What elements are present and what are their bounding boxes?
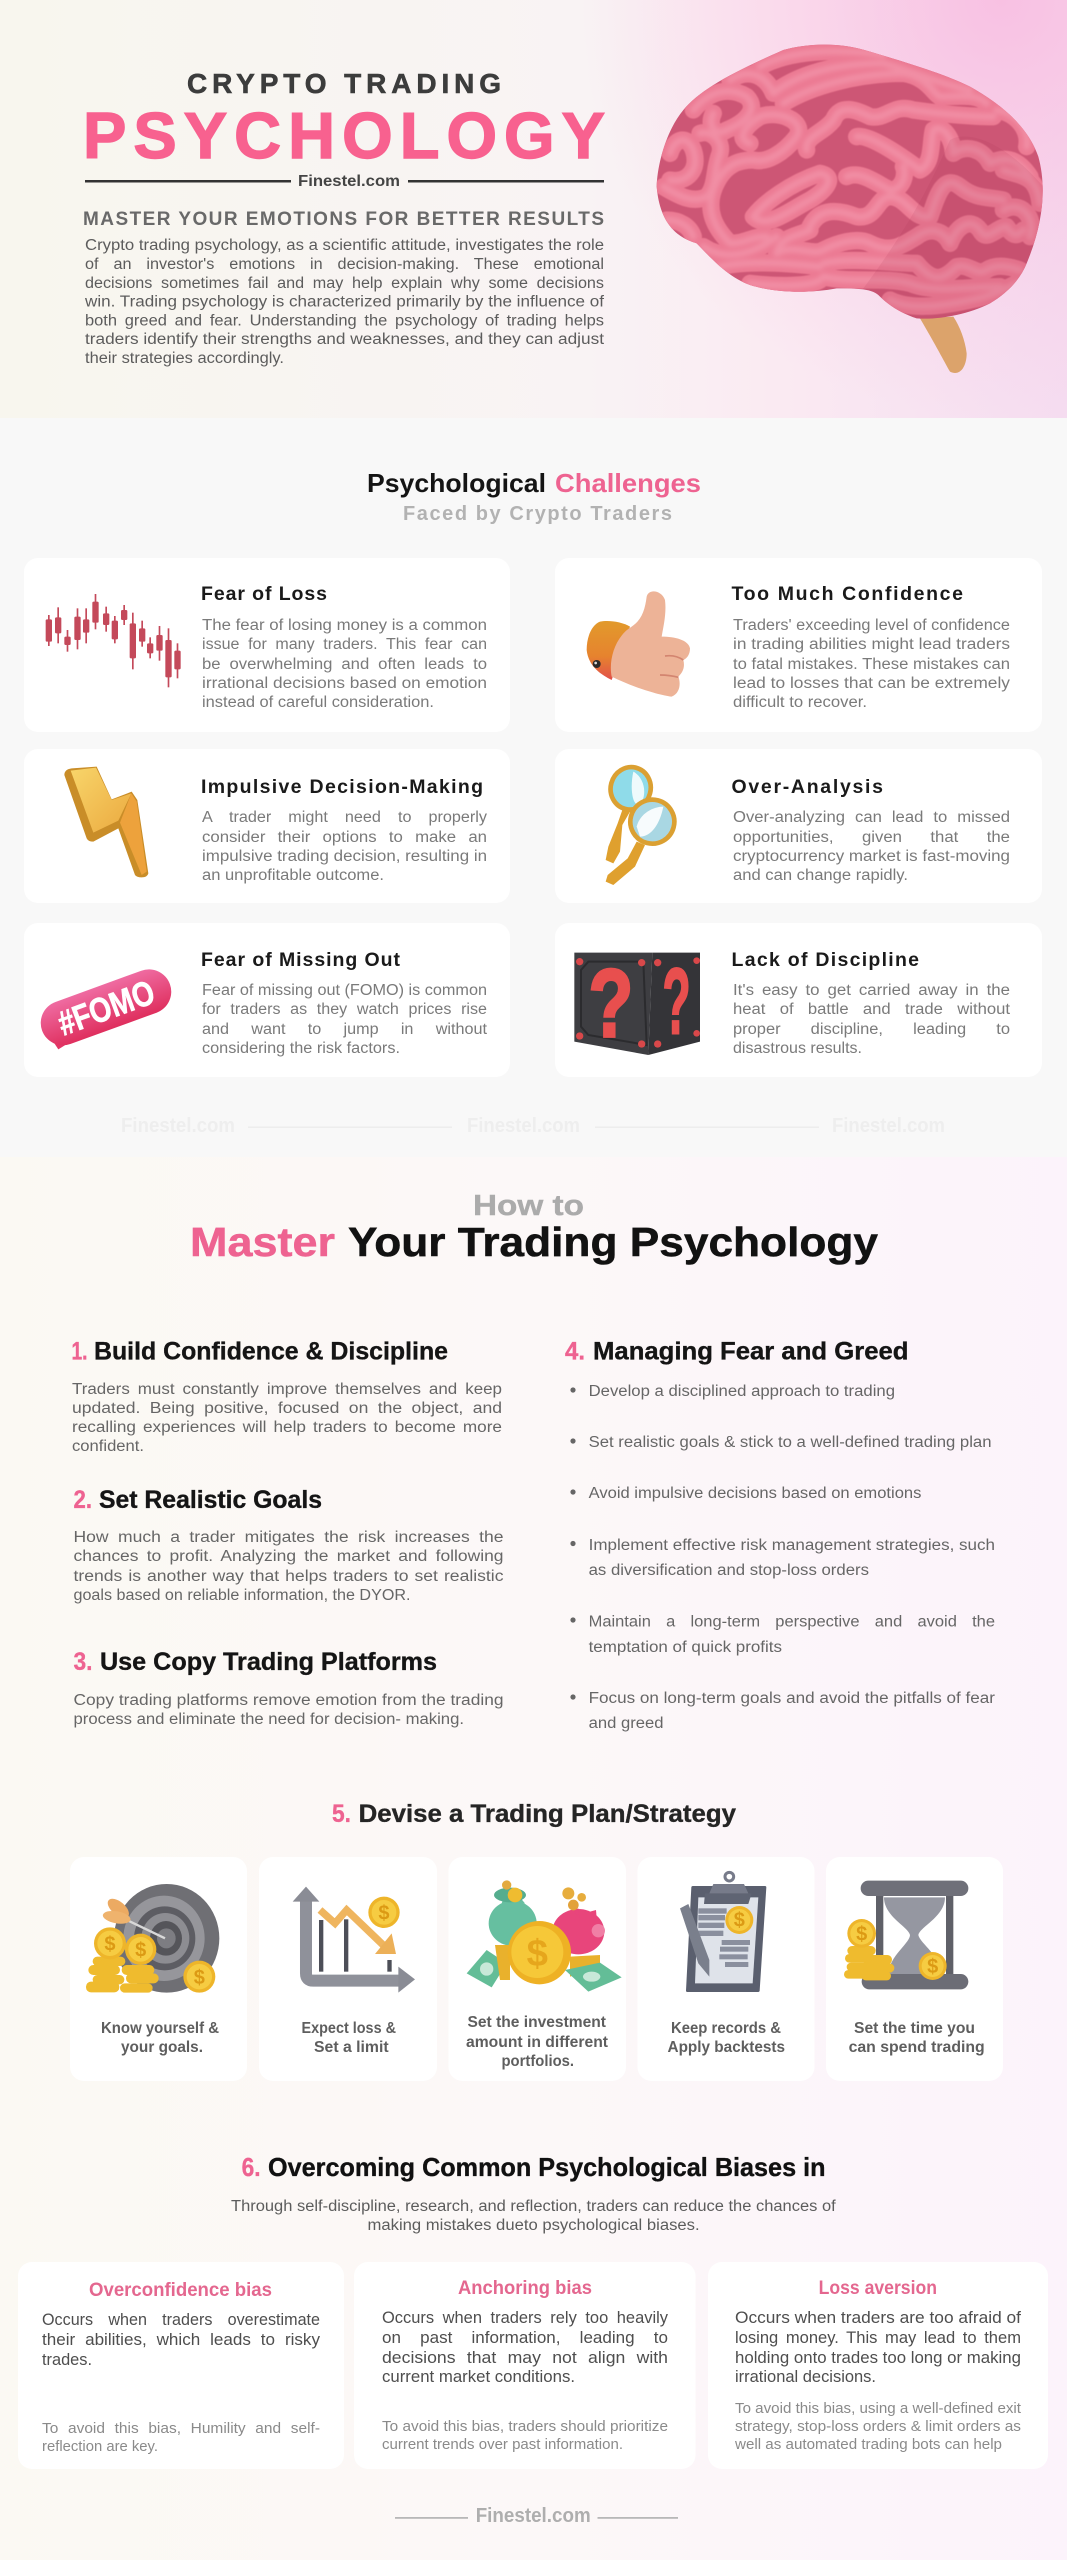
description (382, 2309, 669, 2386)
tip 1: recalling experiences will help traders to become more (72, 1419, 502, 1436)
avoidance tip: To avoid this bias, traders should prioritize (382, 2419, 668, 2435)
tip 3 (74, 1648, 503, 1728)
title: psychology: PSYCHOLOGY (83, 99, 605, 172)
card title: Lack of Discipline (732, 949, 919, 971)
tip 1: confident. (72, 1438, 144, 1455)
label: your goals. (121, 2039, 203, 2056)
watermark strip (121, 1115, 945, 1137)
description: holding onto trades too long or making (735, 2349, 1021, 2367)
tip 1: updated. Being positive, focused on the object, and (72, 1400, 502, 1417)
icon: hourglass with coins (844, 1881, 968, 1989)
label: Keep records & (671, 2020, 781, 2037)
icon: money bag, coin and piggy bank (467, 1880, 622, 1992)
card: anchoring bias (354, 2262, 696, 2469)
tip 3: process and eliminate the need for decision- making. (74, 1711, 464, 1728)
tip 3: 3. (74, 1648, 92, 1676)
label (668, 2020, 785, 2056)
avoidance tip (382, 2419, 668, 2453)
card: know yourself (70, 1857, 247, 2081)
icon: magnifying glasses (606, 763, 679, 885)
card title: Loss aversion (819, 2277, 937, 2299)
card text: It's easy to get carried away in the (733, 982, 1010, 999)
heading: master your trading psychology: Your Trading Psychology (348, 1219, 878, 1265)
description: Occurs when traders rely too heavily (382, 2309, 669, 2327)
card text (733, 982, 1011, 1057)
icon: question mark box: ? (662, 949, 691, 1053)
card title: Over-Analysis (732, 776, 883, 798)
card text (202, 809, 487, 884)
tip 4: managing fear and greed: Set realistic goals & stick to a well-defined trading plan (589, 1434, 992, 1451)
description: decisions that may not align with (382, 2349, 668, 2367)
tip 4: managing fear and greed: as diversification and stop-loss orders (589, 1562, 869, 1579)
label: Apply backtests (668, 2039, 785, 2056)
tip 1: Build Confidence & Discipline (94, 1338, 448, 1366)
card text: and want to jump in without (202, 1021, 488, 1038)
section heading 6: Overcoming Common Psychological Biases in (268, 2152, 826, 2182)
avoidance tip: reflection are key. (42, 2439, 158, 2455)
tip 2: goals based on reliable information, the DYOR. (74, 1587, 411, 1604)
description: losing money. This may lead to them (735, 2329, 1021, 2347)
icon: question mark box (574, 949, 700, 1058)
description: Occurs when traders are too afraid of (735, 2309, 1021, 2327)
label: Know yourself & (101, 2020, 219, 2037)
intro paragraph: traders identify their strengths and weaknesses, and they can adjust (85, 331, 605, 348)
footer site label: Finestel.com (476, 2505, 591, 2527)
label: can spend trading (849, 2039, 985, 2056)
card text (202, 982, 488, 1057)
tip 2: chances to profit. Analyzing the market and following (74, 1548, 504, 1565)
card: fear of missing out (24, 923, 510, 1077)
card text: in trading abilities might lead traders (733, 636, 1010, 653)
label (849, 2020, 985, 2056)
tip 2: How much a trader mitigates the risk increases the (74, 1529, 504, 1546)
label (466, 2014, 609, 2070)
tip 4: managing fear and greed (565, 1338, 995, 1732)
label (101, 2020, 219, 2056)
section intro: making mistakes dueto psychological biases. (368, 2217, 700, 2234)
icon: candlesticks (46, 594, 181, 687)
heading (367, 468, 701, 498)
icon: money bag, coin and piggy bank: $ (527, 1932, 548, 1975)
icon: target with coins: $ (194, 1967, 205, 1989)
panel: header (0, 0, 1067, 418)
card text: difficult to recover. (733, 694, 867, 711)
card: fear of loss (24, 558, 510, 732)
card title: Fear of Missing Out (201, 949, 400, 971)
card text: be overwhelming and often leads to (202, 656, 487, 673)
tip 3: Use Copy Trading Platforms (100, 1648, 437, 1676)
heading: how to: How to (473, 1190, 584, 1222)
card text: A trader might need to properly (202, 809, 487, 826)
heading: Psychological (367, 468, 546, 498)
avoidance tip: strategy, stop-loss orders & limit orders as (735, 2419, 1021, 2435)
tip 4: managing fear and greed: temptation of quick profits (589, 1639, 782, 1656)
label: Set a limit (314, 2039, 389, 2056)
section intro (231, 2198, 836, 2234)
tip 2: Set Realistic Goals (99, 1486, 322, 1514)
subheading: Faced by Crypto Traders (403, 503, 672, 525)
card text: and can change rapidly. (733, 867, 908, 884)
avoidance tip: well as automated trading bots can help (734, 2437, 1002, 2453)
description: current market conditions. (382, 2368, 575, 2386)
intro paragraph: Crypto trading psychology, as a scientific attitude, investigates the role (85, 237, 604, 254)
avoidance tip (42, 2421, 320, 2455)
icon: clipboard (680, 1872, 765, 1991)
card text: Fear of missing out (FOMO) is common (202, 982, 487, 999)
icon: clipboard: $ (734, 1910, 745, 1932)
icon: question mark box: ? (588, 950, 633, 1058)
icon: FOMO speech bubble: #FOMO (53, 974, 160, 1044)
site label with rules: Finestel.com (298, 173, 400, 190)
tip 4: managing fear and greed: Avoid impulsive decisions based on emotions (589, 1485, 922, 1502)
section heading 6: 6. (242, 2152, 261, 2182)
intro paragraph (84, 237, 605, 367)
icon: target with coins: $ (104, 1934, 116, 1956)
tip 4: managing fear and greed: Implement effective risk management strategies, such (589, 1537, 995, 1554)
avoidance tip: To avoid this bias, Humility and self- (42, 2421, 320, 2437)
card text: The fear of losing money is a common (202, 617, 487, 634)
icon: falling chart (293, 1887, 415, 1993)
card text: instead of careful consideration. (202, 694, 434, 711)
card: over-analysis (555, 749, 1042, 903)
icon: falling chart: $ (378, 1903, 390, 1925)
intro paragraph: decisions sometimes fail and may help explain why some decisions (85, 275, 604, 292)
tip 2: trends is another way that helps traders to set realistic (74, 1568, 504, 1585)
card text: opportunities, given that the (733, 829, 1010, 846)
card: lack of discipline (555, 923, 1042, 1077)
card text: heat of battle and trade without (733, 1001, 1011, 1018)
icon: pink brain (657, 45, 1043, 373)
section heading 5: Devise a Trading Plan/Strategy (359, 1800, 736, 1828)
card text (202, 617, 487, 711)
card text: cryptocurrency market is fast-moving (733, 848, 1010, 865)
tip 3: Copy trading platforms remove emotion from the trading (74, 1692, 503, 1709)
card text: irrational decisions based on emotion (202, 675, 487, 692)
icon: thumbs up hand (587, 591, 690, 697)
card text: proper discipline, leading to (733, 1021, 1010, 1038)
card: overconfidence bias (18, 2262, 344, 2469)
panel: psychological challenges (0, 418, 1067, 1157)
tip 1 (72, 1338, 502, 1455)
card text: Traders' exceeding level of confidence (733, 617, 1010, 634)
card text: for traders as they watch prices rise (202, 1001, 487, 1018)
label: amount in different (466, 2034, 609, 2051)
intro paragraph: both greed and fear. Understanding the psychology of trading helps (85, 312, 604, 330)
tip 1: 1. (72, 1338, 88, 1366)
card: keep records (638, 1857, 814, 2081)
card: impulsive decision-making (24, 749, 510, 903)
card title: Fear of Loss (201, 583, 327, 605)
card text: impulsive trading decision, resulting in (202, 848, 487, 865)
card title: Impulsive Decision-Making (201, 776, 483, 798)
icon: target with coins (86, 1884, 219, 1993)
watermark strip: Finestel.com (467, 1115, 580, 1137)
description: Occurs when traders overestimate (42, 2311, 320, 2329)
card title: Too Much Confidence (732, 583, 963, 605)
icon: hourglass with coins: $ (856, 1923, 867, 1945)
card: set the investment (448, 1857, 626, 2081)
watermark strip: Finestel.com (121, 1115, 235, 1137)
card text: considering the risk factors. (202, 1040, 400, 1057)
avoidance tip (734, 2401, 1021, 2453)
card: set the time (826, 1857, 1003, 2081)
avoidance tip: current trends over past information. (382, 2437, 623, 2453)
description: irrational decisions. (735, 2368, 876, 2386)
card: expect loss (259, 1857, 437, 2081)
label: portfolios. (502, 2053, 574, 2070)
tip 2 (74, 1486, 504, 1604)
description: their abilities, which leads to risky (42, 2331, 321, 2349)
description: trades. (42, 2351, 92, 2369)
card text: consider their options to make an (202, 829, 487, 846)
tip 4: managing fear and greed: and greed (589, 1715, 664, 1732)
tip 4: managing fear and greed: Managing Fear and Greed (593, 1338, 908, 1366)
subheading: MASTER YOUR EMOTIONS FOR BETTER RESULTS (83, 209, 604, 230)
card text: disastrous results. (733, 1040, 862, 1057)
card text: to fatal mistakes. These mistakes can (733, 656, 1010, 673)
card text: lead to losses that can be extremely (733, 675, 1010, 692)
description (735, 2309, 1021, 2386)
heading: master your trading psychology: Master (190, 1219, 335, 1265)
section heading 5: 5. (332, 1800, 351, 1828)
card title: Overconfidence bias (89, 2279, 272, 2301)
card: too much confidence (555, 558, 1042, 732)
card text: an unprofitable outcome. (202, 867, 384, 884)
tip 4: managing fear and greed: Focus on long-term goals and avoid the pitfalls of fear (589, 1690, 995, 1707)
card title: Anchoring bias (458, 2277, 592, 2299)
tip 4: managing fear and greed: Develop a disciplined approach to trading (589, 1383, 895, 1400)
panel: how to master your trading psychology (0, 1157, 1067, 2560)
intro paragraph: their strategies accordingly. (85, 350, 284, 367)
avoidance tip: To avoid this bias, using a well-defined exit (735, 2401, 1021, 2417)
label: Set the investment (468, 2014, 607, 2031)
icon: target with coins: $ (135, 1940, 146, 1962)
tip 2: 2. (74, 1486, 92, 1514)
tip 4: managing fear and greed: Maintain a long-term perspective and avoid the (589, 1614, 995, 1631)
description: on past information, leading to (382, 2329, 668, 2347)
card text: Over-analyzing can lead to missed (733, 809, 1010, 826)
icon: hourglass with coins: $ (927, 1956, 938, 1978)
intro paragraph: of an investor's emotions in decision-making. These emotional (85, 256, 604, 273)
intro paragraph: win. Trading psychology is characterized primarily by the influence of (84, 294, 605, 310)
icon: gold lightning bolt (64, 767, 148, 877)
section intro: Through self-discipline, research, and reflection, traders can reduce the chances of (231, 2198, 836, 2215)
watermark strip: Finestel.com (832, 1115, 945, 1137)
card: loss aversion (708, 2262, 1048, 2469)
tip 1: Traders must constantly improve themselves and keep (72, 1381, 502, 1398)
label: Set the time you (854, 2020, 975, 2037)
label: Expect loss & (302, 2020, 396, 2037)
tip 4: managing fear and greed: 4. (565, 1338, 585, 1366)
card text: issue for many traders. This fear can (202, 636, 487, 653)
card text (733, 809, 1010, 884)
heading: Challenges (555, 468, 701, 498)
label (302, 2020, 396, 2056)
card text (733, 617, 1010, 711)
description (42, 2311, 321, 2369)
title: crypto trading: CRYPTO TRADING (187, 68, 501, 99)
